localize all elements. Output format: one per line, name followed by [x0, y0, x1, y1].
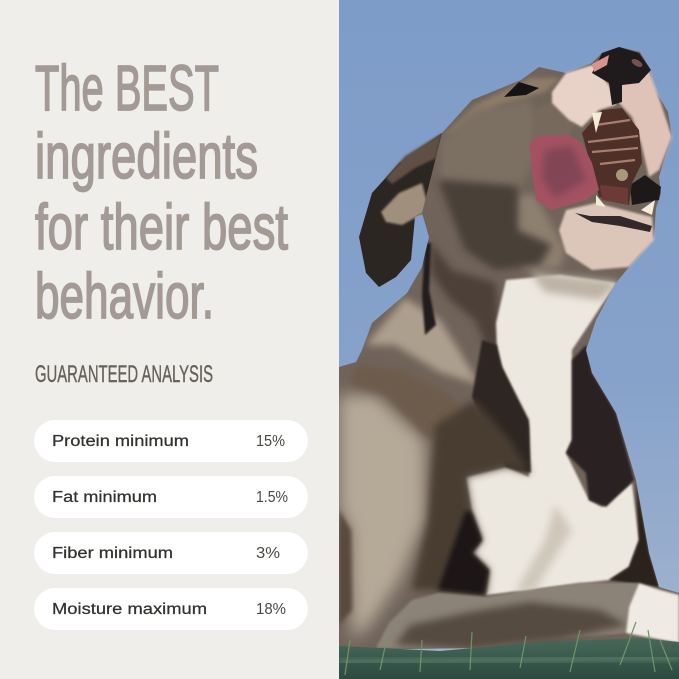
left body dark edge: [339, 510, 352, 625]
fang: [592, 112, 602, 133]
palate ridges: [588, 120, 638, 164]
analysis table: [34, 420, 308, 630]
dog ear: [359, 133, 442, 287]
pink snout left: [552, 65, 616, 127]
row: moisture: 18%: [256, 601, 286, 618]
row: fiber: Fiber minimum: [52, 545, 173, 562]
shoulder band: [352, 366, 457, 440]
nostril left: [592, 55, 609, 72]
pink snout right: [619, 70, 672, 177]
heading: ingredients: [35, 120, 258, 192]
row: protein: Protein minimum: [52, 433, 189, 450]
nostril right: [632, 59, 642, 67]
subheading: guaranteed analysis: GUARANTEED ANALYSIS: [35, 361, 213, 388]
lower black patch: [438, 510, 489, 595]
row: moisture: Moisture maximum: [52, 601, 207, 618]
right edge black: [609, 483, 659, 587]
forehead: [445, 78, 560, 135]
lower head fur: [510, 195, 565, 270]
dog muzzle: [504, 47, 672, 270]
row: fat: [34, 476, 308, 518]
shoulder light fur: [339, 395, 425, 640]
back-of-mouth lump: [616, 169, 628, 181]
photo panel: dog against sky: [339, 0, 679, 679]
central black patch: [472, 340, 531, 473]
head dark cheek: [438, 180, 552, 270]
lower jaw: [559, 203, 654, 270]
lower lip dark: [575, 213, 652, 232]
neck dark region: [429, 240, 500, 350]
neck crease: [422, 243, 436, 335]
foreleg dark band: [395, 602, 628, 650]
grass: [339, 622, 679, 679]
neck light fur: [366, 298, 480, 385]
eye: [504, 82, 539, 97]
upper head mid tone: [441, 103, 532, 184]
row: fat: 1.5%: [256, 489, 288, 506]
heading: behavior.: [35, 260, 214, 332]
nose: [592, 47, 651, 105]
open mouth: [582, 108, 642, 205]
heading: for their best: [35, 191, 288, 263]
row: protein: 15%: [256, 433, 285, 450]
chest shading: [515, 505, 572, 592]
lower teeth: [596, 195, 655, 215]
row: fat: Fat minimum: [52, 489, 157, 506]
muzzle-side fur: [535, 133, 536, 138]
tongue: [529, 135, 599, 210]
row: protein: [34, 420, 308, 462]
dog body: [339, 40, 679, 660]
left panel background: [0, 0, 339, 679]
throat: [600, 185, 628, 205]
mouth back dark: [630, 175, 661, 205]
body base: [339, 40, 679, 660]
white chest: [466, 275, 639, 595]
tongue mauve: [542, 146, 586, 198]
row: fiber: [34, 532, 308, 574]
right black patch: [566, 345, 634, 507]
row: moisture: [34, 588, 308, 630]
heading: The BEST: [35, 52, 219, 124]
white paw: [626, 583, 679, 643]
row: fiber: 3%: [256, 545, 280, 562]
sky: [339, 0, 679, 679]
heading: [35, 52, 288, 332]
shoulder dark: [412, 400, 530, 595]
foreleg: [376, 583, 639, 650]
under-jaw shadow on chest: [530, 272, 620, 300]
